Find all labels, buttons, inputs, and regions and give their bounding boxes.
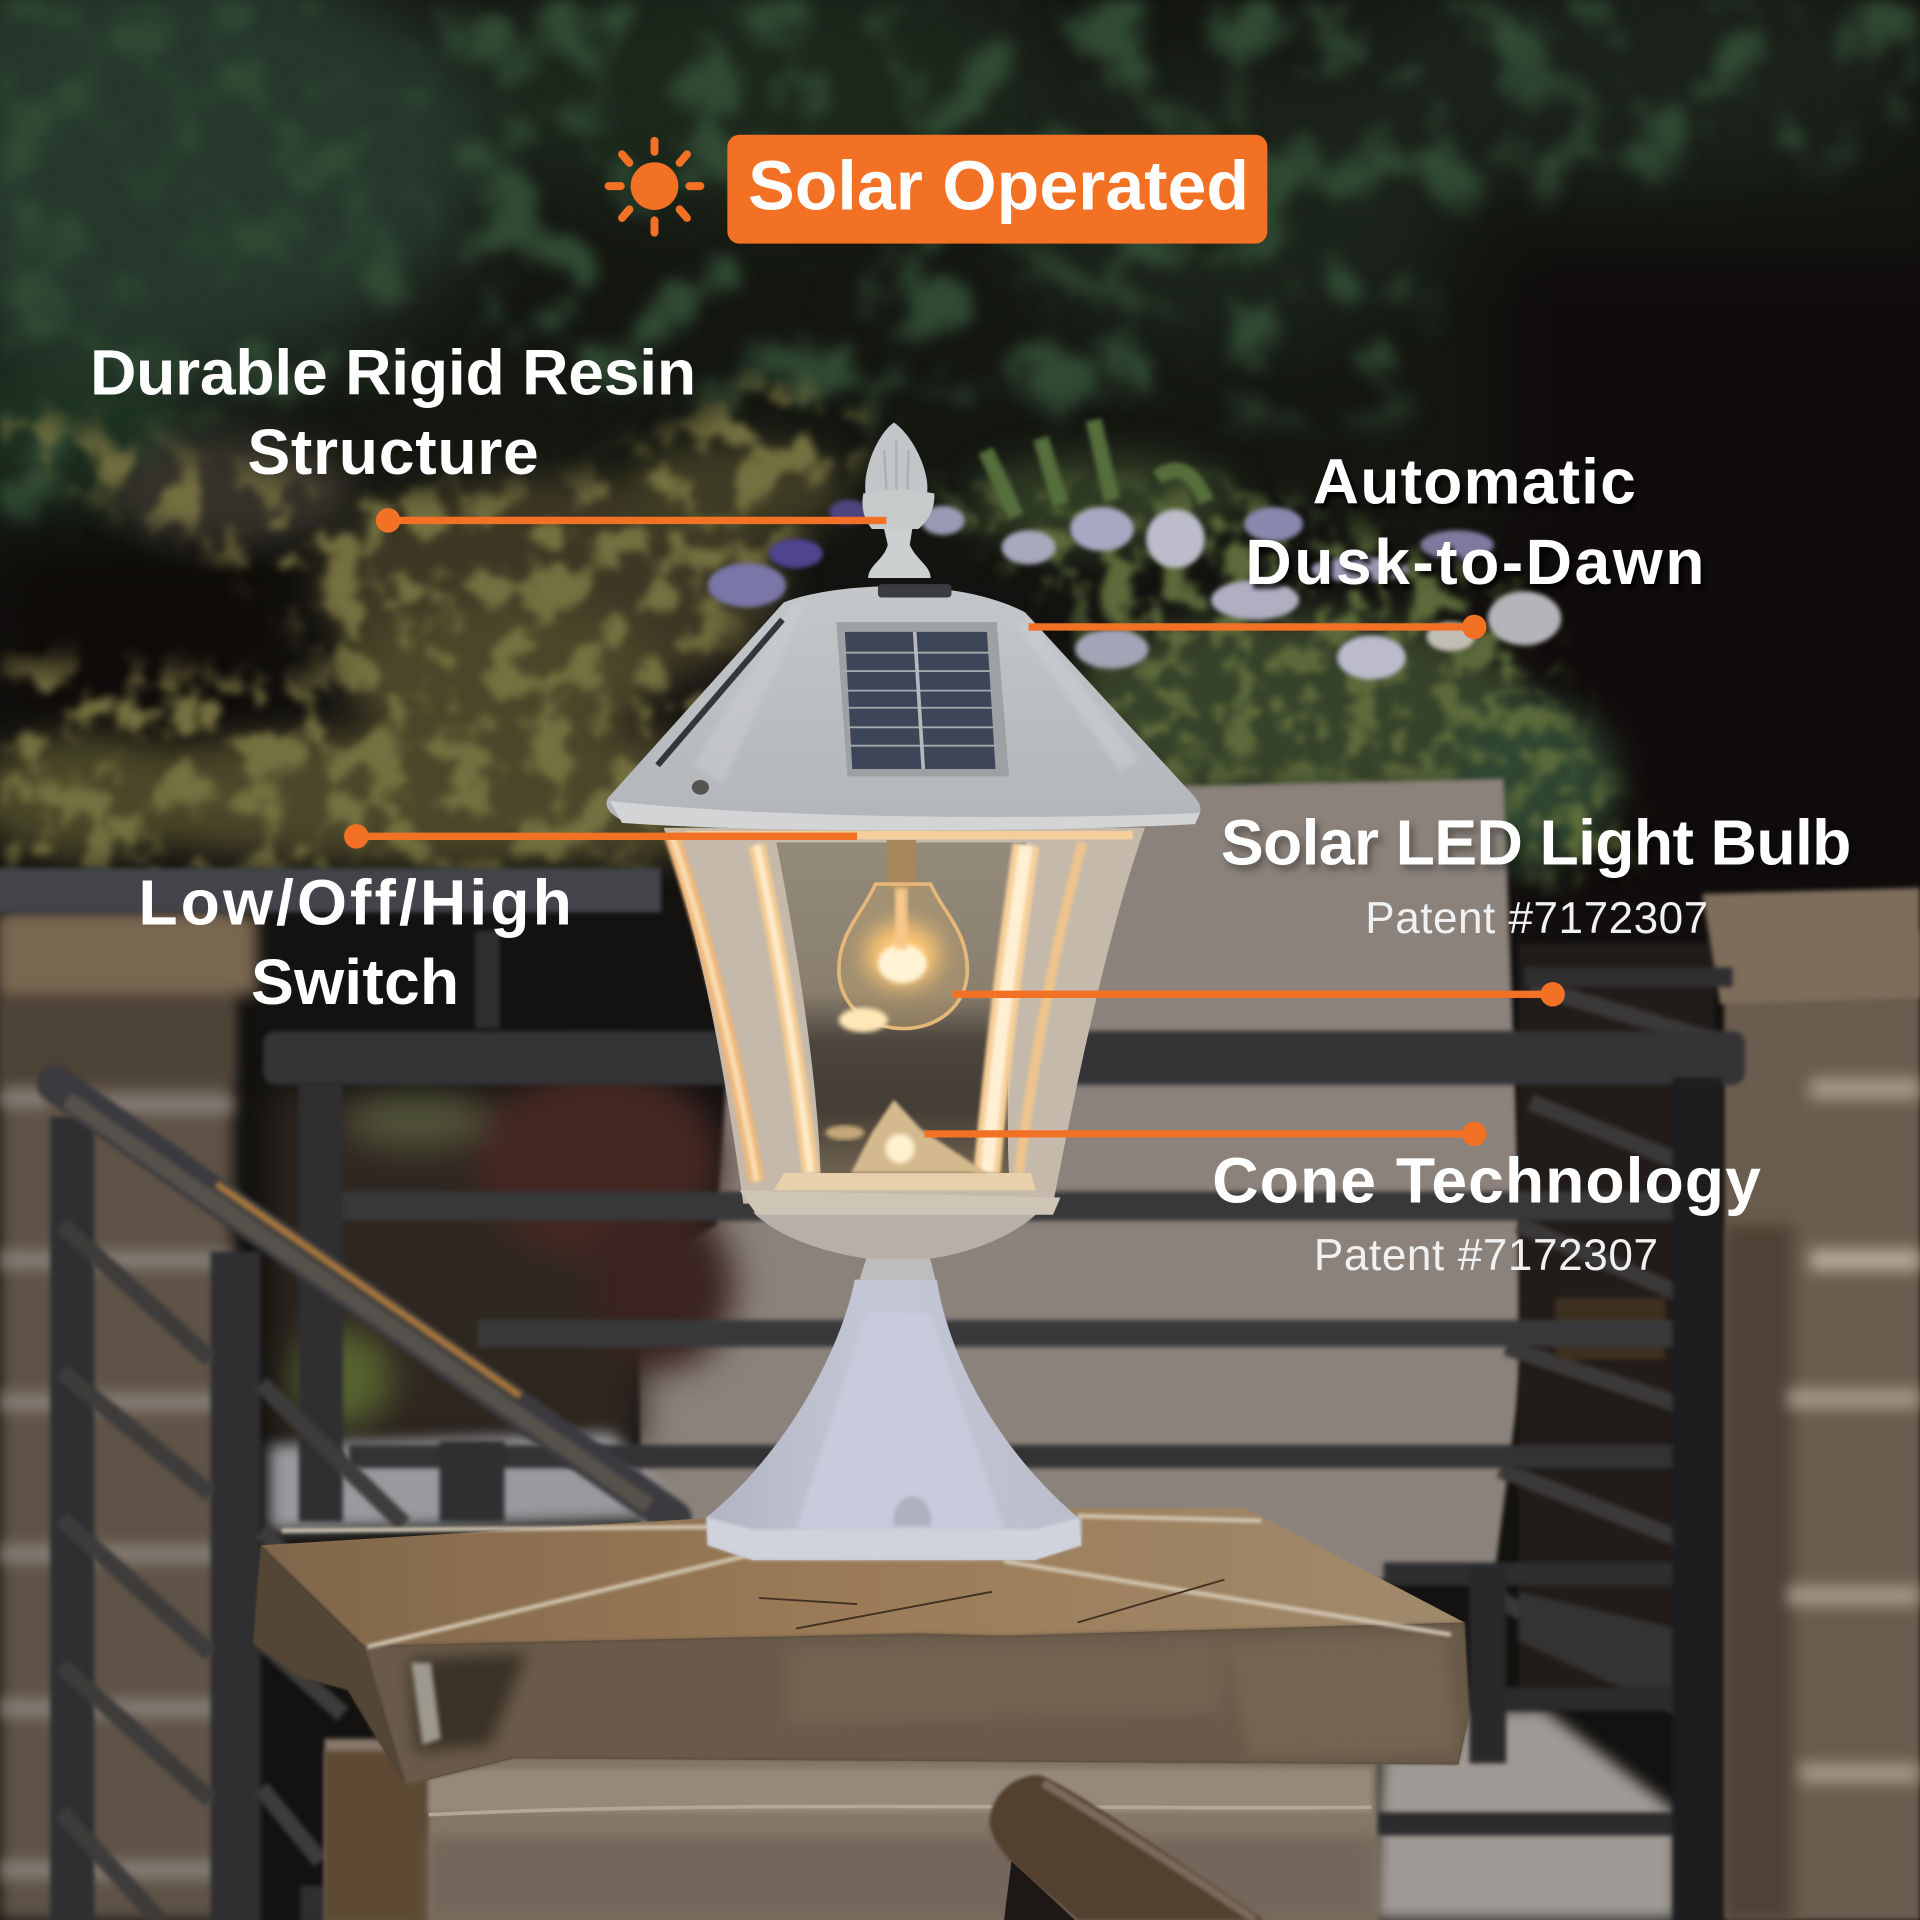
lantern body [664,828,1145,1215]
callout: Cone Technology: Patent #7172307 [1314,1231,1658,1280]
callout: Durable Rigid Resin Structure: Structure [247,416,539,488]
pale floor patches [269,1433,1678,1920]
roof screw [692,780,709,795]
dark red foliage behind lamp [276,1065,735,1445]
callout: Automatic Dusk-to-Dawn: Dusk-to-Dawn [1245,526,1704,598]
light sensor [878,584,951,598]
brick wall left [0,912,257,1920]
stone cap [253,1509,1469,1785]
callout: Low/Off/High Switch: Switch [251,946,459,1018]
flowers and green foliage [708,420,1665,906]
callout: Solar LED Light Bulb [953,806,1851,1007]
callout: Solar LED Light Bulb: Patent #7172307 [1365,894,1708,943]
right dark railing gap [1488,943,1714,1714]
callout: Automatic Dusk-to-Dawn [1029,445,1704,639]
callout: Durable Rigid Resin Structure: Durable Rigid Resin [90,336,696,408]
horizontal railings [0,868,1745,1836]
solar lamp [606,422,1200,1560]
finial [862,422,934,578]
vertical posts [50,931,1722,1920]
diagonal railings [55,1084,673,1920]
callout: Low/Off/High Switch: Low/Off/High [138,866,572,938]
callout: Automatic Dusk-to-Dawn: Automatic [1313,445,1636,517]
callout: Solar LED Light Bulb: Solar LED Light Bulb [1221,806,1851,878]
roof side slit [658,620,782,765]
callout: Low/Off/High Switch [138,824,857,1018]
callout: Cone Technology [924,1122,1761,1280]
brick pillar right [1702,888,1920,1920]
glass pane [776,842,1026,1173]
light bulb [839,840,967,1032]
reflector cone [825,1100,987,1173]
badge: sun icon [609,141,700,233]
lamp base [707,1207,1081,1560]
badge: Solar Operated: Solar Operated [748,146,1249,224]
stone pillar below cap [324,1739,1378,1920]
badge: Solar Operated [727,135,1267,244]
bulb reflection [839,1008,888,1032]
taupe cushion wall [637,779,1524,1580]
glow strips [671,833,1082,1182]
roof [606,584,1200,830]
dark trees [0,0,1920,530]
olive shrub [0,367,906,882]
bronze handrail at bottom [989,1775,1264,1920]
solar panel [836,622,1009,776]
callout: Cone Technology: Cone Technology [1212,1144,1761,1216]
callout: Durable Rigid Resin Structure [90,336,887,533]
